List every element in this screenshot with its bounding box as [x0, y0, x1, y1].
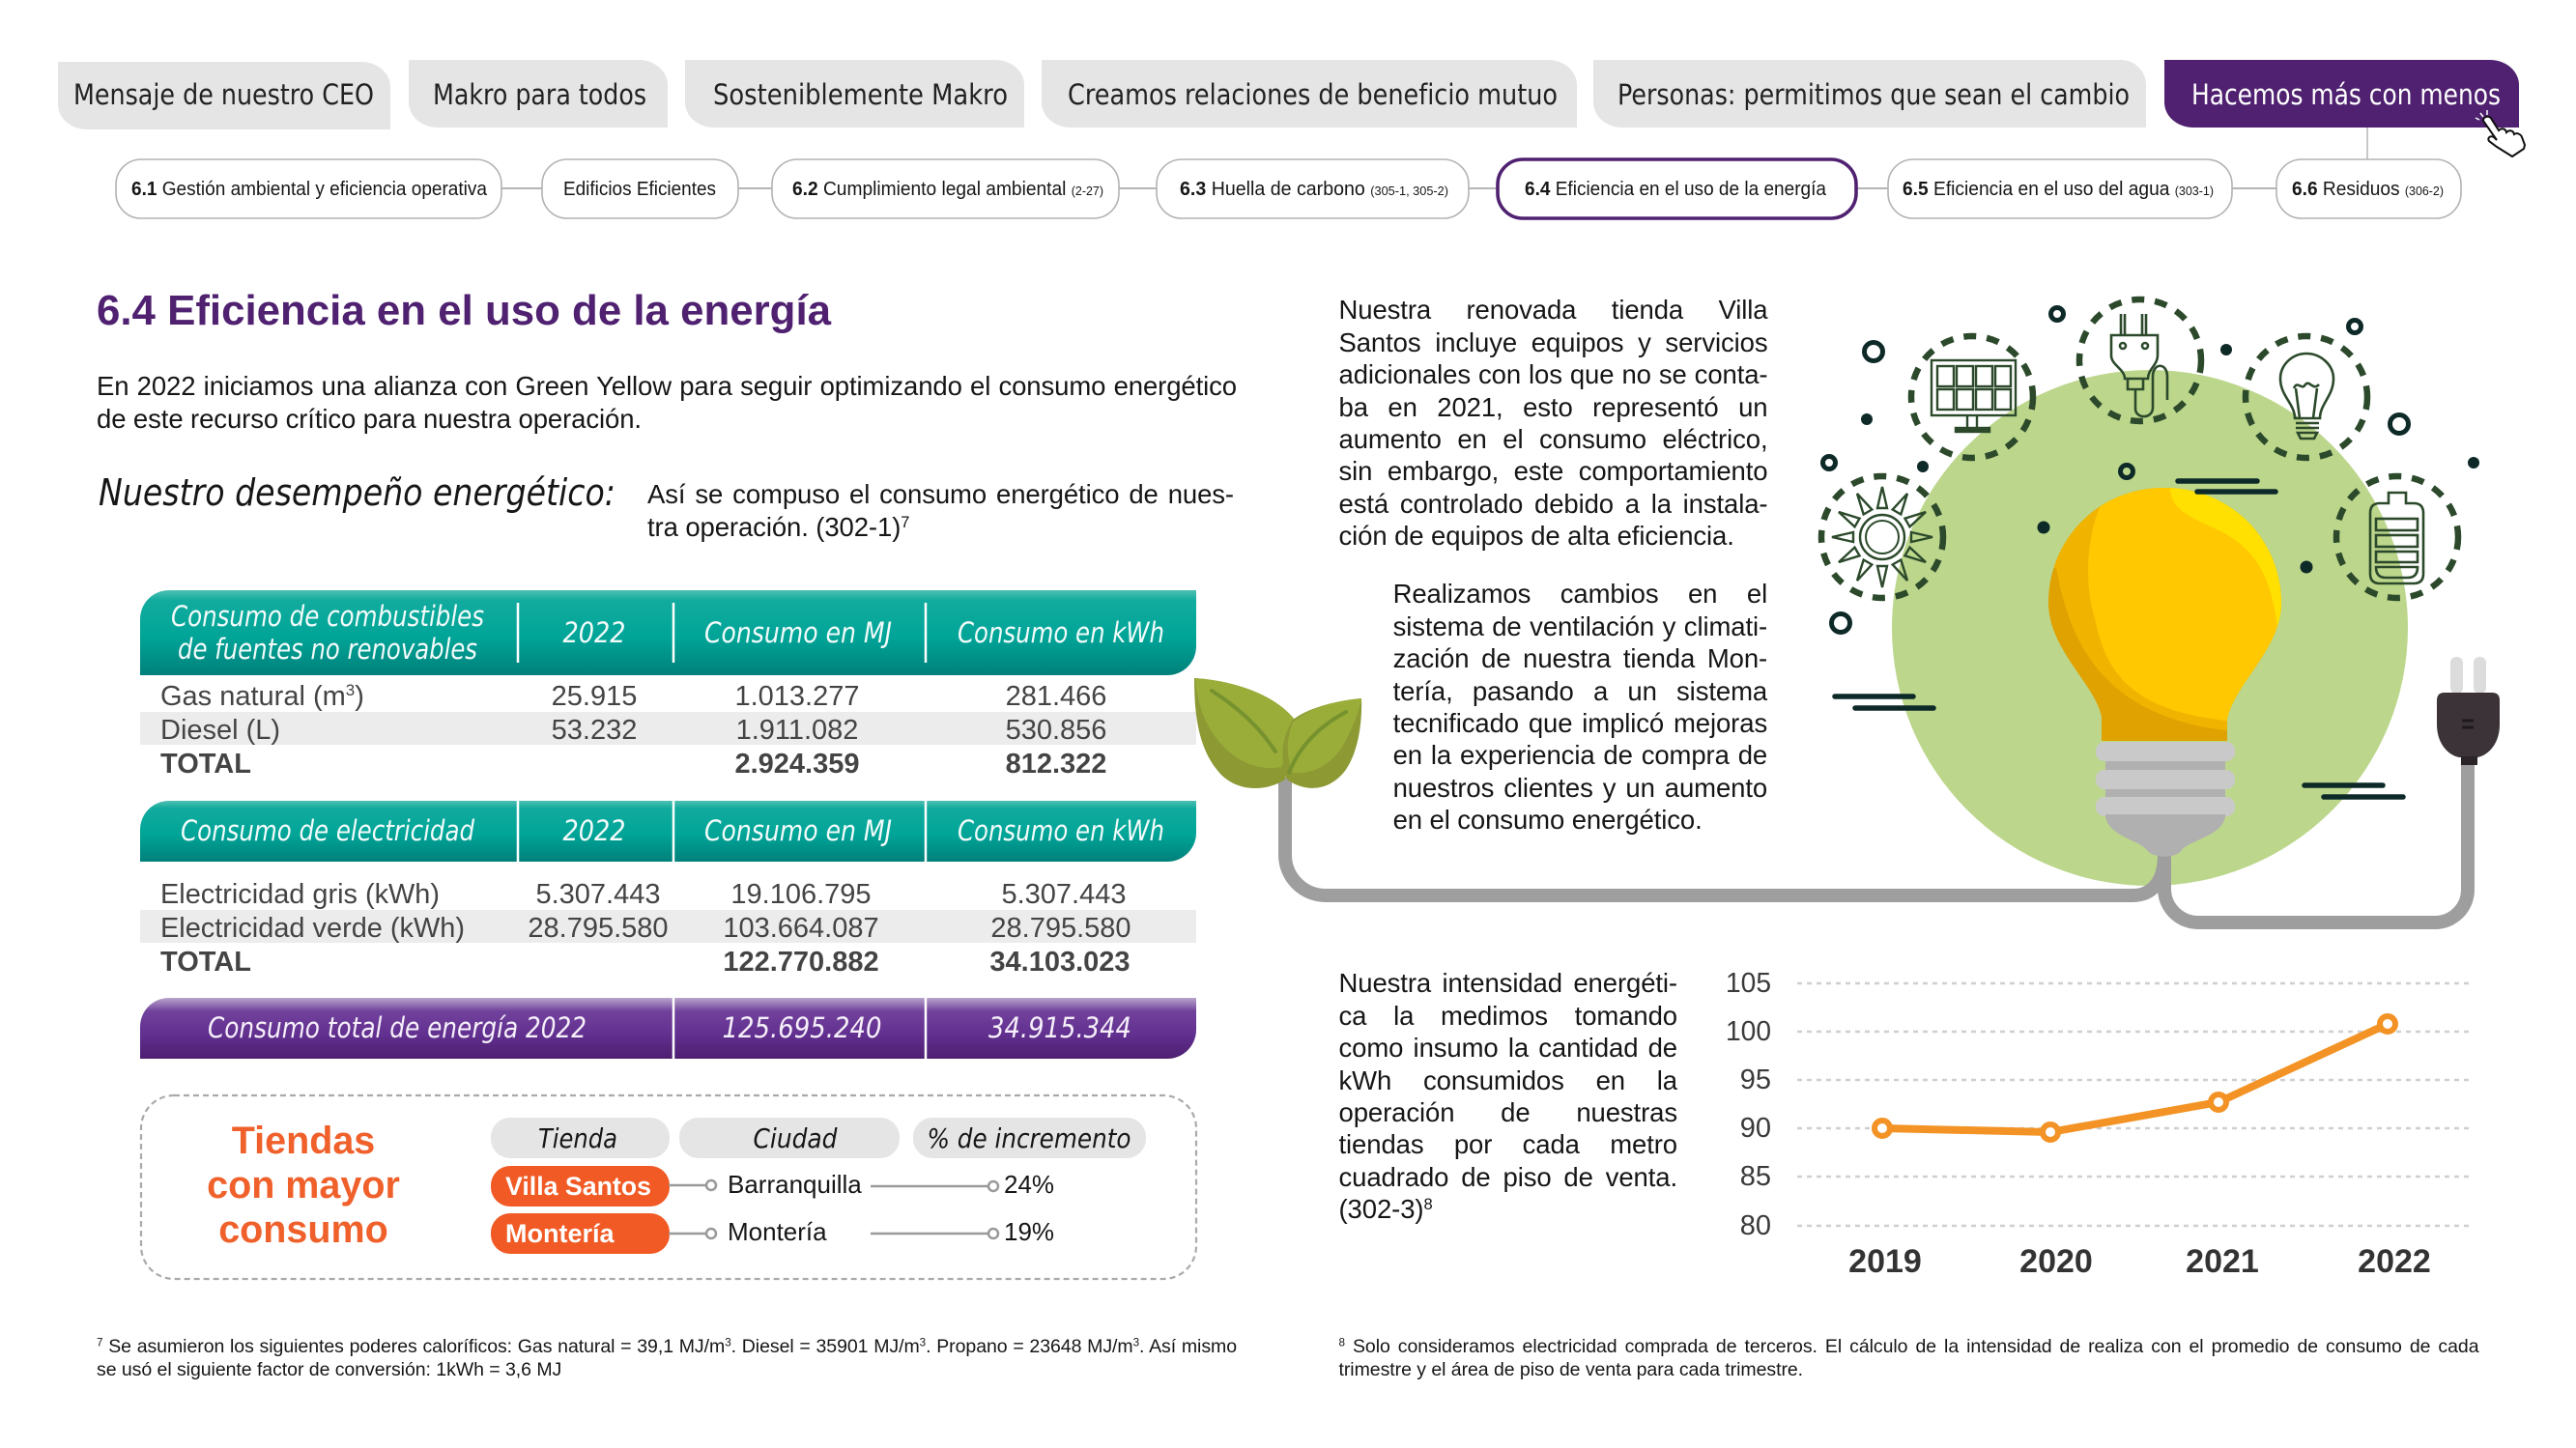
header row: Consumo en kWh [958, 814, 1164, 847]
total energy bar [140, 998, 1196, 1059]
header row: de fuentes no renovables [178, 633, 477, 666]
x axis labels: 2021 [2186, 1243, 2259, 1280]
text block: ventilación Montería: tería, pasando a un sistema [1393, 676, 1767, 706]
y axis labels: 100 [1726, 1016, 1771, 1047]
column headers: Tienda [538, 1122, 617, 1154]
y axis labels [1726, 968, 1771, 1241]
row: diesel: 1.911.082 [736, 715, 858, 746]
row: Villa Santos: Barranquilla [728, 1170, 862, 1199]
intro paragraph: En 2022 iniciamos una alianza con Green Yellow para seguir optimizando el consumo energético [97, 371, 1237, 401]
pill 6.6: 6.6 Residuos (306-2) [2292, 179, 2444, 200]
icon: bulb [2246, 336, 2367, 458]
pill edificios: Edificios Eficientes [563, 179, 716, 200]
text block: Villa Santos [1339, 295, 1768, 551]
row: electricidad gris [160, 879, 1127, 910]
tab: Sosteniblemente Makro: Sosteniblemente Makro [713, 78, 1008, 111]
text block: intensidad energética: como insumo la cantidad de [1339, 1033, 1677, 1063]
footnote 7 [97, 1336, 1237, 1380]
row: gas natural: 281.466 [1006, 681, 1106, 712]
text block: ventilación Montería: Realizamos cambios en el [1393, 579, 1767, 609]
icon: leaves [1194, 678, 1361, 788]
text block: ventilación Montería [1393, 579, 1768, 835]
y axis labels: 90 [1740, 1113, 1771, 1144]
x axis labels [1848, 1243, 2431, 1280]
header row: 2022 [562, 814, 626, 847]
row: electricidad gris: Electricidad gris (kWh) [160, 879, 440, 910]
tab: Makro para todos [409, 60, 668, 128]
footnote 8: trimestre y el área de piso de venta para cada trimestre. [1339, 1359, 1803, 1380]
row: diesel: 530.856 [1006, 715, 1106, 746]
heading: tiendas con mayor consumo [207, 1120, 400, 1251]
cables [1285, 758, 2468, 923]
column headers: Ciudad [754, 1122, 838, 1154]
text block: ventilación Montería: zación de nuestra tienda Mon- [1393, 643, 1767, 673]
row: electricidad verde: Electricidad verde (kWh) [160, 913, 465, 944]
total energy bar: Consumo total de energía 2022 [208, 1011, 587, 1044]
text block: Villa Santos: Santos incluye equipos y servicios [1339, 327, 1768, 357]
pill 6.4 active: 6.4 Eficiencia en el uso de la energía [1525, 179, 1827, 200]
row: total: 2.924.359 [734, 749, 860, 780]
header row [140, 801, 1196, 862]
data points [1875, 1016, 2395, 1140]
text block: Villa Santos: aumento en el consumo eléctrico, [1339, 424, 1768, 454]
header row: Consumo en MJ [704, 814, 892, 847]
text block: ventilación Montería: en la experiencia de compra de [1393, 740, 1767, 770]
tab: Hacemos más con menos (active) [2164, 60, 2519, 128]
x axis labels: 2019 [1848, 1243, 1922, 1280]
row: Montería: 19% [1004, 1217, 1054, 1246]
column headers: % de incremento [928, 1122, 1131, 1154]
row: total: 812.322 [1006, 749, 1106, 780]
x axis labels: 2020 [2019, 1243, 2093, 1280]
text block: ventilación Montería: tecnificado que implicó mejoras [1393, 708, 1767, 738]
text block: Villa Santos: sin embargo, este comportamiento [1339, 456, 1768, 486]
row: electricidad verde: 28.795.580 [528, 913, 669, 944]
row: total [160, 947, 1131, 978]
tab: Personas [1593, 60, 2146, 128]
row: gas natural [160, 681, 1106, 712]
series line [1882, 1024, 2388, 1132]
grid lines [1797, 983, 2469, 1226]
intro paragraph: de este recurso crítico para nuestra operación. [97, 404, 642, 434]
y axis labels: 85 [1740, 1161, 1771, 1192]
tab: Mensaje de nuestro CEO: Mensaje de nuestro CEO [73, 78, 374, 111]
text block: ventilación Montería: en el consumo energético. [1393, 805, 1703, 835]
light bulb [2048, 488, 2281, 857]
icon: battery [2336, 476, 2458, 598]
row: diesel: 53.232 [552, 715, 637, 746]
table: combustibles [140, 590, 1196, 780]
heading: Nuestro desempeño energético: Nuestro desempeño energético: [99, 471, 615, 514]
main navigation tabs [58, 60, 2519, 129]
row: diesel [160, 715, 1106, 746]
row: gas natural: Gas natural (m [160, 681, 346, 712]
row: gas natural: 1.013.277 [734, 681, 860, 712]
icon: solar panel [1911, 336, 2033, 458]
tab: Personas: Personas: permitimos que sean el cambio [1617, 78, 2130, 111]
pill 6.5: 6.5 Eficiencia en el uso del agua (303-1) [1903, 179, 2214, 200]
header row: 2022 [562, 616, 626, 649]
row: Montería [491, 1213, 1054, 1254]
footnote 7: se usó el siguiente factor de conversión: 1kWh = 3,6 MJ [97, 1359, 561, 1380]
row: total: TOTAL [160, 749, 251, 780]
row: electricidad verde: 28.795.580 [990, 913, 1131, 944]
row: total: TOTAL [160, 947, 251, 978]
line chart: intensidad energética [1726, 968, 2469, 1280]
row: electricidad gris: 5.307.443 [1001, 879, 1127, 910]
row: Villa Santos: 24% [1004, 1170, 1054, 1199]
row: Montería: Montería [728, 1217, 827, 1246]
tab: Creamos relaciones [1042, 60, 1577, 128]
row: gas natural: ) [355, 681, 364, 712]
header row [140, 590, 1196, 675]
header row: Consumo de combustibles [171, 600, 484, 633]
energy composition paragraph: tra operación. (302-1)7 [647, 512, 909, 541]
text block: intensidad energética: operación de nuestras [1339, 1097, 1677, 1127]
text block: intensidad energética [1339, 968, 1677, 1224]
row: Villa Santos [491, 1166, 1054, 1207]
header row: Consumo en kWh [958, 616, 1164, 649]
column headers [491, 1118, 1146, 1158]
text block: intensidad energética: kWh consumidos en la [1339, 1065, 1677, 1095]
text block: intensidad energética: (302-3)8 [1339, 1194, 1433, 1224]
row: Villa Santos: Villa Santos [505, 1172, 651, 1201]
pill 6.3: 6.3 Huella de carbono (305-1, 305-2) [1180, 179, 1448, 200]
pill 6.1: 6.1 Gestión ambiental y eficiencia operativa [131, 179, 488, 200]
heading: tiendas con mayor consumo: consumo [218, 1208, 388, 1251]
energy composition paragraph [647, 479, 1234, 542]
text block: Villa Santos: ba en 2021, esto representó un [1339, 392, 1768, 422]
text block: intensidad energética: tiendas por cada metro [1339, 1129, 1677, 1159]
row: total [160, 749, 1106, 780]
row: total: 34.103.023 [989, 947, 1131, 978]
tab: Makro para todos: Makro para todos [433, 78, 646, 111]
footnote 8 [1339, 1336, 2479, 1380]
tab: Hacemos más con menos (active): Hacemos más con menos [2191, 78, 2501, 111]
tab: Sosteniblemente Makro [685, 60, 1024, 128]
footnote 7: 7 Se asumieron los siguientes poderes caloríficos: Gas natural = 39,1 MJ/m3. Diesel = 35901 MJ/m3. Propano = 23648 MJ/m3. Así mismo [97, 1336, 1237, 1357]
text block: ventilación Montería: nuestros clientes y un aumento [1393, 773, 1767, 803]
dots and rings [1822, 307, 2479, 797]
tab: Creamos relaciones: Creamos relaciones de beneficio mutuo [1068, 78, 1558, 111]
footnote 8: 8 Solo consideramos electricidad comprada de terceros. El cálculo de la intensidad de realiza con el promedio de consumo de cada [1339, 1336, 2479, 1357]
y axis labels: 95 [1740, 1065, 1771, 1095]
intro paragraph [97, 371, 1237, 434]
power plug [2437, 657, 2500, 765]
energy composition paragraph: Así se compuso el consumo energético de nues- [647, 479, 1234, 508]
icon: hand cursor [2476, 110, 2525, 156]
title: 6.4 Eficiencia en el uso de la energía [97, 287, 832, 334]
text block: ventilación Montería: sistema de ventilación y climati- [1393, 611, 1767, 641]
table: electricidad [140, 801, 1196, 978]
pill 6.2: 6.2 Cumplimiento legal ambiental (2-27) [792, 179, 1103, 200]
text block: intensidad energética: ca la medimos tomando [1339, 1001, 1677, 1031]
row: electricidad gris: 5.307.443 [535, 879, 661, 910]
row: electricidad gris: 19.106.795 [730, 879, 872, 910]
green circle [1892, 370, 2408, 886]
row: Montería: Montería [505, 1219, 615, 1248]
row: diesel: Diesel (L) [160, 715, 280, 746]
row: electricidad verde [160, 913, 1131, 944]
header row: Consumo de electricidad [181, 814, 474, 847]
text block: Villa Santos: está controlado debido a la instala- [1339, 489, 1768, 519]
y axis labels: 80 [1740, 1210, 1771, 1241]
text block: Villa Santos: Nuestra renovada tienda Villa [1339, 295, 1768, 325]
panel: tiendas con mayor consumo [141, 1095, 1196, 1279]
subsection navigation pills [116, 128, 2461, 218]
text block: Villa Santos: adicionales con los que no se conta- [1339, 359, 1768, 389]
row: total: 122.770.882 [723, 947, 879, 978]
row: gas natural: 25.915 [552, 681, 637, 712]
row: electricidad verde: 103.664.087 [723, 913, 879, 944]
heading: tiendas con mayor consumo: con mayor [207, 1164, 400, 1207]
icon: sun [1821, 476, 1943, 598]
y axis labels: 105 [1726, 968, 1771, 999]
icon: plug [2079, 299, 2201, 421]
text block: Villa Santos: ción de equipos de alta eficiencia. [1339, 521, 1734, 551]
header row: Consumo en MJ [704, 616, 892, 649]
x axis labels: 2022 [2358, 1243, 2431, 1280]
text block: intensidad energética: cuadrado de piso de venta. [1339, 1162, 1677, 1192]
heading: tiendas con mayor consumo: Tiendas [232, 1120, 375, 1162]
illustration: energy bulb [1285, 299, 2500, 923]
total energy bar: 125.695.240 [723, 1011, 881, 1044]
total energy bar: 34.915.344 [988, 1011, 1131, 1044]
tab: Mensaje de nuestro CEO [58, 62, 390, 129]
text block: intensidad energética: Nuestra intensidad energéti- [1339, 968, 1677, 998]
row: gas natural: 3 [346, 681, 355, 699]
